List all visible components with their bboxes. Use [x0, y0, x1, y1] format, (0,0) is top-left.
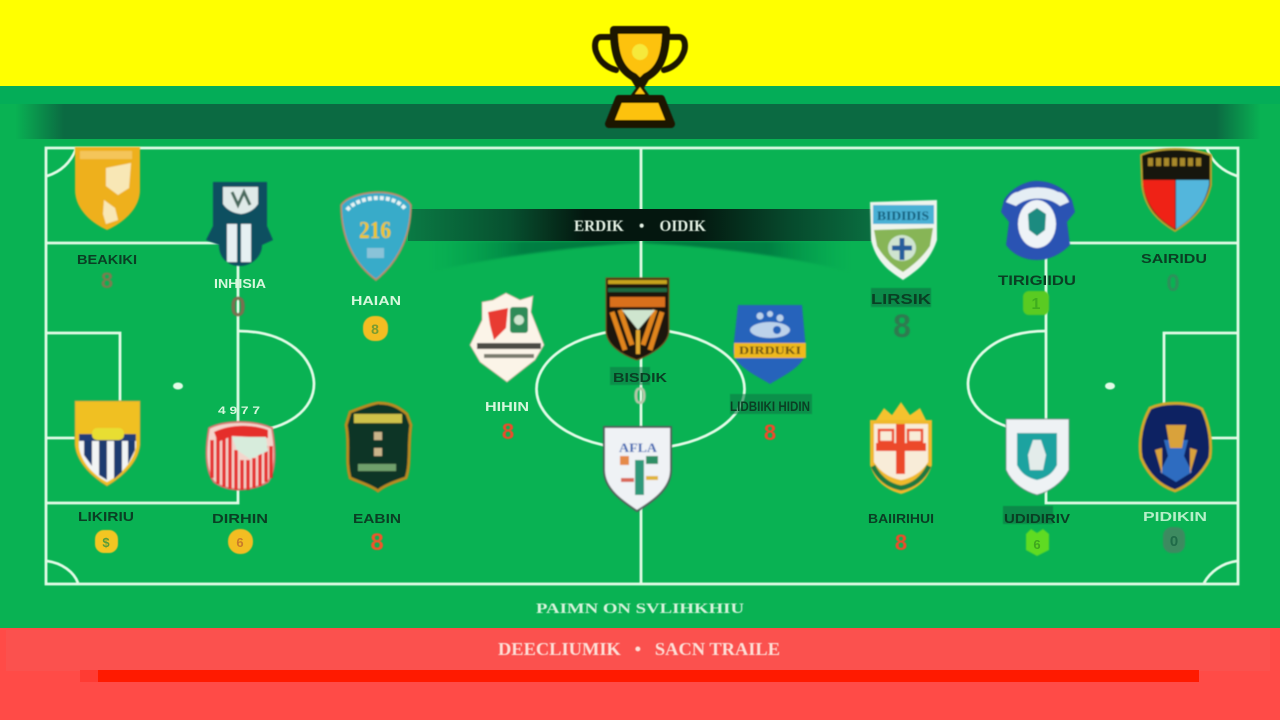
club 11: yellow and navy striped crest: LIKIRIU: [78, 509, 134, 524]
club 10: black red and blue crest: 0: [1166, 270, 1180, 297]
icon: trophy: [595, 30, 685, 124]
club 8: white and green crest: [870, 200, 937, 344]
club 4: cream and red crest: HIHIN: [485, 399, 529, 414]
ribbon bar: [408, 209, 872, 241]
club 10: black red and blue crest: [1141, 149, 1211, 297]
club 9: blue round crest: [998, 181, 1076, 315]
club 8: white and green crest: 8: [893, 308, 911, 344]
club 12: red striped crest: [206, 405, 275, 554]
club 9: blue round crest: 1: [1032, 296, 1041, 313]
club 3: sky blue crest: [341, 192, 411, 341]
club 14: crowned crest: [868, 402, 934, 555]
dark title bar: [0, 104, 1280, 139]
club 5: orange and black crest: [606, 278, 669, 410]
title ribbon: [408, 209, 872, 272]
club 5: orange and black crest: BISDIK: [613, 370, 668, 385]
club 12: red striped crest: 4 9 7 7: [218, 405, 260, 417]
club 8: white and green crest: BIDIDIS: [877, 208, 929, 223]
club 2: dark teal crest: 0: [230, 291, 246, 322]
club 13: black and gold crest: 8: [370, 529, 384, 556]
club 4: cream and red crest: [470, 293, 544, 444]
footer accent stripe: [80, 670, 1199, 682]
club 15: white and teal crest: 6: [1033, 537, 1041, 552]
club 11: yellow and navy striped crest: $: [102, 535, 110, 550]
club 4: cream and red crest: 8: [502, 419, 514, 444]
club 16: navy crest: PIDIKIN: [1143, 509, 1207, 524]
club 9: blue round crest: TIRIGIIDU: [998, 272, 1076, 288]
club 6: blue crest: LIDBIIKI HIDIN: [730, 398, 810, 414]
upper green strip: [0, 86, 1280, 104]
club 14: crowned crest: BAIIRIHUI: [868, 511, 934, 526]
pitch background: [0, 85, 1280, 630]
badge: [363, 316, 388, 341]
club 5: orange and black crest: 0: [633, 383, 647, 410]
yellow header band: [0, 0, 1280, 86]
club 10: black red and blue crest: SAIRIDU: [1141, 251, 1207, 266]
pitch markings: [46, 148, 1238, 584]
ribbon shadow left: [430, 241, 638, 272]
ribbon shadow right: [644, 241, 850, 272]
subtitle caption: PAIMN ON SVLIHKHIU: [536, 601, 744, 617]
club 6: blue crest: DIRDUKI: [739, 343, 801, 357]
club 13: black and gold crest: EABIN: [353, 511, 401, 526]
club 3: sky blue crest: HAIAN: [351, 293, 401, 308]
club 2: dark teal crest: [206, 182, 273, 322]
club 16: navy crest: [1140, 403, 1211, 553]
club 3: sky blue crest: 8: [371, 321, 379, 337]
footer text: DEECLIUMIK • SACN TRAILE: [498, 639, 780, 659]
red footer band: [0, 628, 1280, 720]
club 7: white centre crest: AFLA: [619, 440, 658, 455]
club 1: yellow crest: [75, 147, 140, 293]
club 13: black and gold crest: [346, 403, 411, 556]
club 12: red striped crest: DIRHIN: [212, 511, 268, 526]
ribbon text: ERDIK • OIDIK: [574, 218, 706, 235]
club 6: blue crest: 8: [764, 420, 776, 445]
club 8: white and green crest: LIRSIK: [871, 291, 931, 308]
club 16: navy crest: 0: [1170, 533, 1178, 550]
footer panel: [6, 630, 1270, 671]
club 1: yellow crest: BEAKIKI: [77, 252, 137, 267]
club 15: white and teal crest: [1003, 419, 1070, 556]
badge: [95, 530, 118, 553]
club 11: yellow and navy striped crest: [75, 401, 140, 553]
club 14: crowned crest: 8: [895, 530, 907, 555]
club 3: sky blue crest: 216: [359, 218, 391, 244]
badge: [228, 529, 253, 554]
club 1: yellow crest: 8: [101, 268, 113, 293]
club 2: dark teal crest: INHISIA: [214, 276, 267, 291]
club 7: white centre crest: [604, 427, 671, 511]
club 6: blue crest: [730, 305, 812, 445]
club 15: white and teal crest: UDIDIRIV: [1004, 511, 1070, 526]
club 12: red striped crest: 6: [236, 535, 244, 550]
